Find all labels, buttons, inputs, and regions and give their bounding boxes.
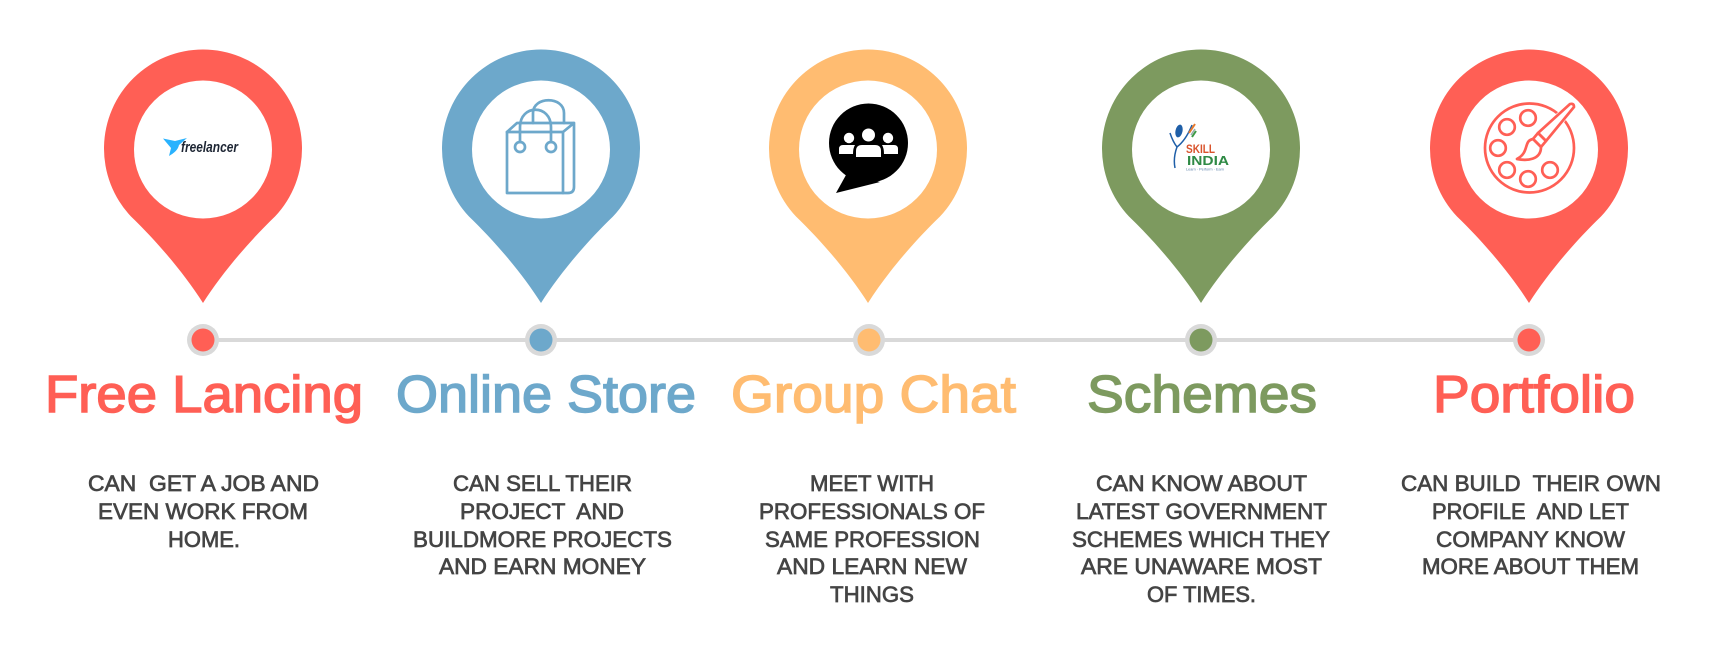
text block: HOME.	[168, 527, 240, 552]
icon: Skill India logo: Learn · Perform · Earn	[1186, 166, 1224, 172]
text block: ARE UNAWARE MOST	[1081, 554, 1322, 579]
timeline dot: Group Chat	[853, 324, 885, 356]
panel: Free Lancing	[45, 50, 363, 552]
timeline dot: Schemes	[1185, 324, 1217, 356]
heading: Free Lancing	[45, 366, 363, 424]
icon: group chat bubble	[829, 104, 908, 193]
panel: Group Chat	[731, 50, 1017, 607]
text block: AND LEARN NEW	[777, 554, 967, 579]
icon: paint palette and brush	[1485, 104, 1574, 192]
text block: SCHEMES WHICH THEY	[1072, 527, 1330, 552]
pin: blue	[442, 50, 640, 303]
timeline dot: Free Lancing	[187, 324, 219, 356]
timeline dot: Online Store	[525, 324, 557, 356]
icon: freelancer logo: freelancer	[181, 140, 239, 156]
icon: Skill India logo	[1170, 124, 1229, 172]
text block	[1401, 471, 1661, 579]
text block: LATEST GOVERNMENT	[1076, 499, 1327, 524]
text block: BUILDMORE PROJECTS	[413, 527, 672, 552]
icon: shopping bag	[507, 100, 574, 193]
heading: Portfolio	[1433, 366, 1635, 424]
icon: Skill India logo: INDIA	[1187, 154, 1229, 168]
icon: Skill India logo: SKILL	[1186, 144, 1215, 156]
text block: MEET WITH	[810, 471, 934, 496]
text block: CAN KNOW ABOUT	[1096, 471, 1307, 496]
text block	[1072, 471, 1330, 607]
text block: CAN BUILD THEIR OWN	[1401, 471, 1661, 496]
text block: EVEN WORK FROM	[98, 499, 308, 524]
text block: PROFILE AND LET	[1432, 499, 1629, 524]
pin: orange	[769, 50, 967, 303]
timeline	[187, 324, 1545, 356]
text block: OF TIMES.	[1147, 582, 1256, 607]
icon: freelancer logo	[163, 138, 239, 156]
pin: red	[104, 50, 302, 303]
panel: Online Store	[396, 50, 696, 579]
text block: CAN SELL THEIR	[453, 471, 632, 496]
text block: SAME PROFESSION	[765, 527, 980, 552]
panel: Portfolio	[1401, 50, 1661, 579]
text block	[88, 471, 319, 552]
text block: MORE ABOUT THEM	[1422, 554, 1639, 579]
panel: Schemes	[1072, 50, 1330, 607]
text block: CAN GET A JOB AND	[88, 471, 319, 496]
timeline dot: Portfolio	[1513, 324, 1545, 356]
pin: green	[1102, 50, 1300, 303]
heading: Online Store	[396, 366, 696, 424]
text block: COMPANY KNOW	[1436, 527, 1625, 552]
text block: THINGS	[830, 582, 914, 607]
text block	[759, 471, 985, 607]
text block: PROFESSIONALS OF	[759, 499, 985, 524]
heading: Schemes	[1087, 366, 1317, 424]
text block: PROJECT AND	[460, 499, 624, 524]
heading: Group Chat	[731, 366, 1017, 424]
text block: AND EARN MONEY	[439, 554, 646, 579]
text block	[413, 471, 672, 579]
pin: red	[1430, 50, 1628, 303]
